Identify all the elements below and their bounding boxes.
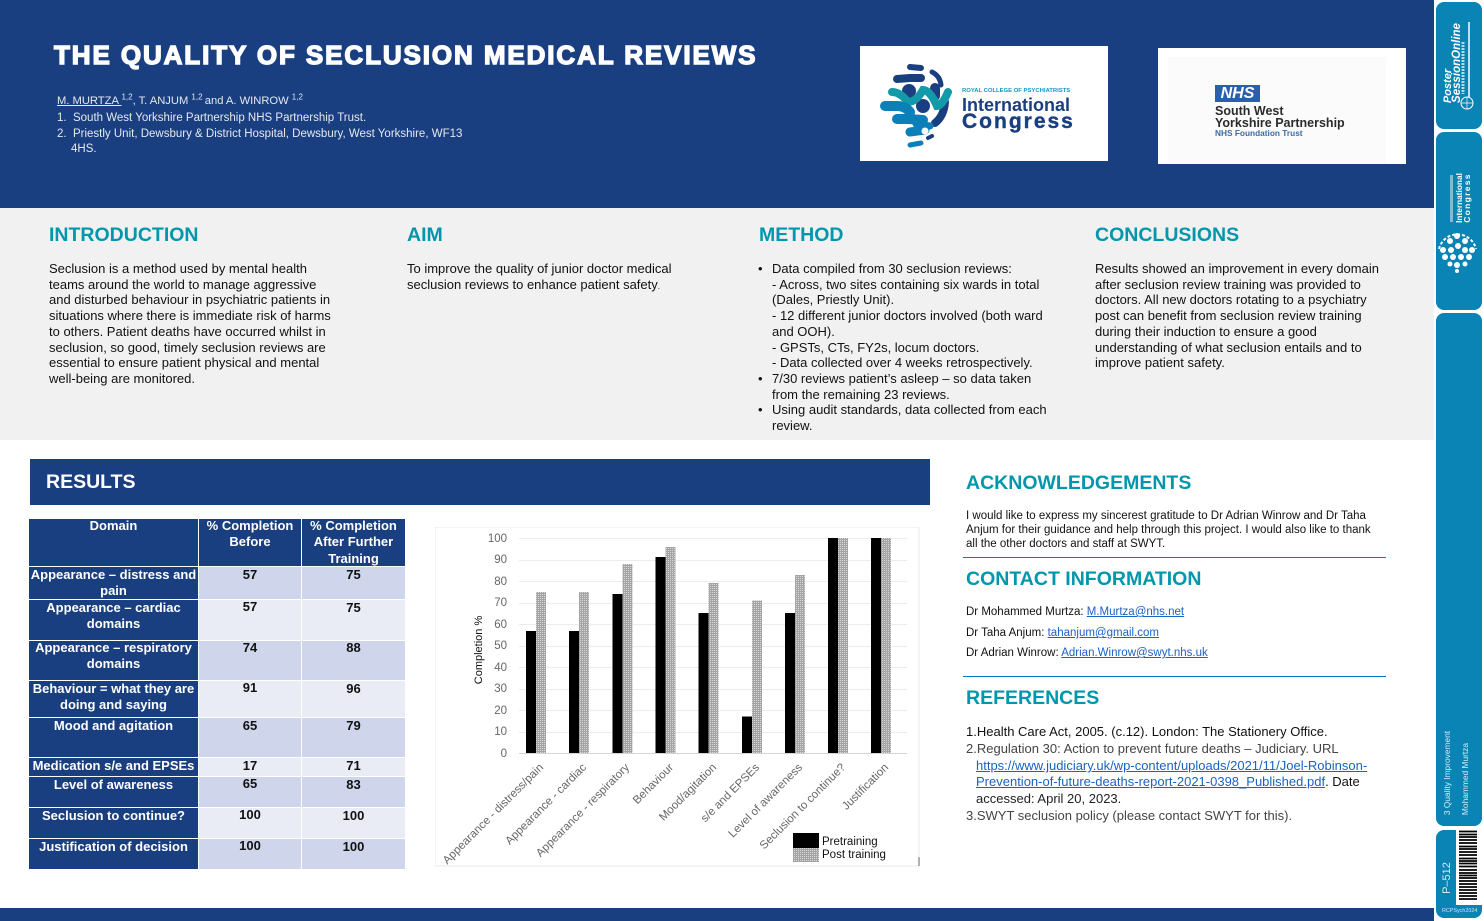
heading: results banner: [30, 459, 930, 505]
authors and affiliations: 1. South West Yorkshire Partnership NHS Partnership Trust.: [57, 112, 366, 124]
bar chart: completion before and after training: 70: [494, 597, 507, 609]
side tab: Poster Session Online: [1436, 2, 1482, 129]
side tab: International Congress: Congress: [1462, 173, 1472, 223]
results table: Domain: [90, 518, 137, 533]
text: introduction: seclusion, so good, timely seclusion reviews are: [49, 340, 326, 355]
results table: Before: [229, 534, 271, 549]
text: aim: [407, 261, 671, 292]
results table: 100: [343, 808, 364, 823]
text: method: review.: [772, 418, 812, 433]
text: references: accessed: April 20, 2023.: [976, 791, 1121, 806]
side tab: category and author: [1436, 313, 1482, 826]
logo: RCPsych International Congress: ROYAL COLLEGE OF PSYCHIATRISTS: [962, 88, 1070, 94]
bar chart: completion before and after training: 10: [494, 726, 507, 738]
bar chart: completion before and after training: 80: [494, 576, 507, 588]
text: references: 1.Health Care Act, 2005. (c.12). London: The Stationery Office.: [966, 724, 1328, 739]
text: method: - Across, two sites containing six wards in total: [772, 277, 1039, 292]
text: method: •: [758, 402, 763, 417]
text: contact information: Dr Adrian Winrow: Adrian.Winrow@swyt.nhs.uk: [966, 647, 1208, 659]
bar chart: completion before and after training: 20: [494, 705, 507, 717]
text: aim: seclusion reviews to enhance patient safety.: [407, 277, 660, 292]
results table: % Completion: [207, 518, 293, 533]
bar chart: completion before and after training: s/e and EPSEs: [699, 761, 762, 825]
text: acknowledgements: I would like to express my sincerest gratitude to Dr Adrian Winrow and Dr Taha: [966, 510, 1366, 522]
bar chart: completion before and after training: 60: [494, 619, 507, 631]
results table: 74: [243, 640, 257, 655]
bar chart: completion before and after training: Mood/agitation: [657, 762, 719, 823]
results table: domains: [87, 616, 140, 631]
bar chart: completion before and after training: 40: [494, 662, 507, 674]
text: introduction: and disturbed behaviour in psychiatric patients in: [49, 292, 330, 307]
text: contact information: Dr Mohammed Murtza: M.Murtza@nhs.net: [966, 606, 1184, 618]
results table: Justification of decision: [39, 839, 188, 854]
bar chart: completion before and after training: Post training: [822, 849, 886, 861]
results table: 83: [346, 777, 361, 792]
heading: conclusions: CONCLUSIONS: [1095, 224, 1239, 246]
bar chart: completion before and after training: 50: [494, 640, 507, 652]
text: aim: To improve the quality of junior doctor medical: [407, 261, 671, 276]
text: method: Data compiled from 30 seclusion reviews:: [772, 261, 1012, 276]
results table: After Further: [314, 534, 393, 549]
text: references: Prevention-of-future-deaths-report-2021-0398_Published.pdf. Date: [976, 774, 1360, 789]
text: acknowledgements: all the other doctors and staff at SWYT.: [966, 538, 1165, 550]
results table: Behaviour = what they are: [33, 681, 194, 696]
results table: 65: [243, 718, 257, 733]
bar chart: completion before and after training: Level of awareness: [727, 761, 805, 840]
results table: Mood and agitation: [54, 718, 173, 733]
heading: references: REFERENCES: [966, 687, 1099, 709]
logo: RCPsych International Congress: [860, 46, 1108, 161]
bar chart: completion before and after training: 90: [494, 554, 507, 566]
results table: 75: [346, 600, 361, 615]
text: method: •: [758, 371, 763, 386]
results table: [29, 519, 405, 869]
bar chart: completion before and after training: Seclusion to continue?: [758, 762, 848, 852]
text: conclusions: understanding of what seclusion entails and to: [1095, 340, 1362, 355]
text: introduction: Seclusion is a method used by mental health: [49, 261, 307, 276]
side tab: International Congress: International: [1454, 173, 1464, 223]
text: method: - GPSTs, CTs, FY2s, locum doctors.: [772, 340, 979, 355]
results table: Level of awareness: [54, 777, 173, 792]
authors and affiliations: M. MURTZA 1,2, T. ANJUM 1,2 and A. WINROW 1,2: [57, 92, 303, 107]
heading: method: METHOD: [759, 224, 844, 246]
side tab: category and author: Mohammed Murtza: [1460, 743, 1470, 815]
results table: 65: [243, 776, 257, 791]
text: contact information: Dr Taha Anjum: tahanjum@gmail.com: [966, 627, 1159, 639]
side tab: poster number and barcode: P–512: [1441, 862, 1453, 894]
authors and affiliations: 4HS.: [71, 143, 97, 155]
results table: 88: [346, 640, 361, 655]
text: acknowledgements: [966, 510, 1371, 550]
text: method: Using audit standards, data collected from each: [772, 402, 1047, 417]
text: acknowledgements: Anjum for their guidance and help through this project. I would also like to thank: [966, 524, 1371, 536]
text: contact information: [966, 606, 1208, 659]
side tab: poster number and barcode: [1436, 830, 1482, 918]
bar chart: completion before and after training: Appearance - respiratory: [534, 761, 632, 860]
text: method: from the remaining 23 reviews.: [772, 387, 950, 402]
results table: 75: [346, 567, 361, 582]
text: references: 3.SWYT seclusion policy (please contact SWYT for this).: [966, 808, 1292, 823]
heading: results banner: RESULTS: [46, 471, 136, 493]
results table: 71: [346, 758, 361, 773]
text: method: - 12 different junior doctors involved (both ward: [772, 308, 1043, 323]
text: method: - Data collected over 4 weeks retrospectively.: [772, 355, 1033, 370]
results table: Seclusion to continue?: [42, 808, 185, 823]
bar chart: completion before and after training: Pretraining: [822, 836, 878, 848]
results table: 96: [346, 681, 361, 696]
logo: NHS South West Yorkshire Partnership: Yorkshire Partnership: [1215, 116, 1345, 130]
text: introduction: [49, 261, 331, 386]
results table: domains: [87, 656, 140, 671]
results table: Medication s/e and EPSEs: [33, 758, 194, 773]
results table: 57: [243, 567, 257, 582]
bar chart: completion before and after training: Appearance - distress/pain: [441, 762, 546, 867]
results table: 91: [243, 680, 257, 695]
text: conclusions: improve patient safety.: [1095, 355, 1225, 370]
logo: NHS South West Yorkshire Partnership: South West: [1215, 104, 1284, 118]
bar chart: completion before and after training: 100: [488, 533, 507, 545]
results table: 57: [243, 599, 257, 614]
results table: 100: [239, 838, 261, 853]
text: conclusions: after seclusion review training was provided to: [1095, 277, 1361, 292]
results table: 79: [346, 718, 361, 733]
text: method: [758, 261, 1047, 433]
text: introduction: teams around the world to manage aggressive: [49, 277, 316, 292]
text: references: https://www.judiciary.uk/wp-content/uploads/2021/11/Joel-Robinson-: [976, 758, 1367, 773]
heading: contact information: CONTACT INFORMATION: [966, 568, 1201, 590]
authors and affiliations: [57, 92, 462, 155]
heading: introduction: INTRODUCTION: [49, 224, 198, 246]
text: conclusions: Results showed an improvement in every domain: [1095, 261, 1379, 276]
text: method: and OOH).: [772, 324, 835, 339]
logo: RCPsych International Congress: Congress: [962, 110, 1075, 133]
results table: Appearance – respiratory: [35, 640, 192, 655]
text: conclusions: post can benefit from seclusion review training: [1095, 308, 1362, 323]
text: introduction: essential to ensure patient physical and mental: [49, 355, 319, 370]
text: method: •: [758, 261, 763, 276]
authors and affiliations: 2. Priestly Unit, Dewsbury & District Hospital, Dewsbury, West Yorkshire, WF13: [57, 128, 462, 140]
text: introduction: to others. Patient deaths have occurred whilst in: [49, 324, 326, 339]
results table: % Completion: [310, 518, 397, 533]
footer band: [0, 908, 1434, 921]
text: introduction: situations where there is immediate risk of harms: [49, 308, 331, 323]
results table: pain: [100, 583, 127, 598]
text: conclusions: [1095, 261, 1379, 370]
logo: RCPsych International Congress: International: [962, 95, 1070, 115]
results table: 100: [239, 807, 261, 822]
text: conclusions: during their induction to ensure a good: [1095, 324, 1317, 339]
bar chart: completion before and after training: [435, 527, 920, 867]
results table: 17: [243, 758, 257, 773]
text: introduction: well-being are monitored.: [49, 371, 195, 386]
results table: Appearance – cardiac: [46, 600, 181, 615]
bar chart: completion before and after training: 0: [501, 748, 507, 760]
side tab: Poster Session Online: SessionOnline: [1451, 23, 1463, 103]
text: conclusions: doctors. All new doctors rotating to a psychiatry: [1095, 292, 1367, 307]
results table: Training: [328, 551, 379, 566]
text: method: 7/30 reviews patient’s asleep – so data taken: [772, 371, 1031, 386]
title: THE QUALITY OF SECLUSION MEDICAL REVIEWS: [54, 40, 757, 70]
side tab: category and author: 3 Quality Improvement: [1442, 731, 1452, 815]
logo: NHS South West Yorkshire Partnership: NHS Foundation Trust: [1215, 128, 1303, 138]
side tab: poster number and barcode: RCPSych2024: [1442, 908, 1477, 914]
logo: NHS South West Yorkshire Partnership: [1158, 48, 1406, 164]
text: method: (Dales, Priestly Unit).: [772, 292, 894, 307]
results table: Appearance – distress and: [31, 567, 196, 582]
side tab: Poster Session Online: Poster: [1442, 69, 1454, 103]
bar chart: completion before and after training: Appearance - cardiac: [503, 761, 589, 847]
header band: [0, 0, 1434, 208]
bar chart: completion before and after training: Justification: [840, 762, 891, 813]
results table: 100: [343, 839, 364, 854]
bar chart: completion before and after training: Behaviour: [631, 762, 676, 807]
panel: summary sections: [0, 208, 1434, 440]
bar chart: completion before and after training: 30: [494, 683, 507, 695]
heading: aim: AIM: [407, 224, 443, 246]
side tab: International Congress: [1436, 132, 1482, 310]
text: references: 2.Regulation 30: Action to prevent future deaths – Judiciary. URL: [966, 741, 1339, 756]
logo: NHS South West Yorkshire Partnership: NHS: [1221, 85, 1254, 102]
bar chart: completion before and after training: Completion %: [473, 616, 485, 684]
heading: acknowledgements: ACKNOWLEDGEMENTS: [966, 472, 1191, 494]
text: references: [966, 724, 1368, 823]
results table: doing and saying: [60, 697, 167, 712]
